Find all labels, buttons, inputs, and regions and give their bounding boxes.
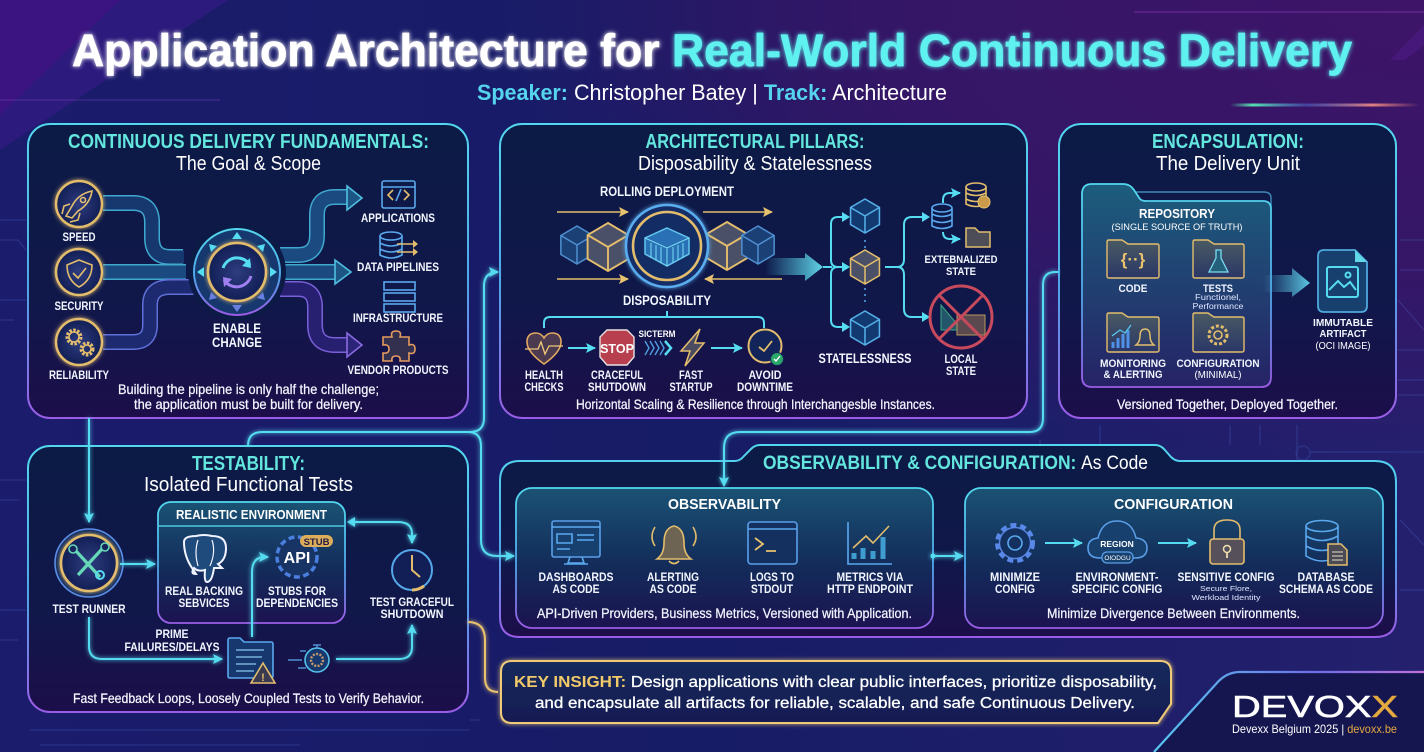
right labels: INFRASTRUCTURE	[353, 311, 443, 325]
icon: alerting bell	[652, 526, 696, 564]
configuration heading: CONFIGURATION	[1114, 496, 1233, 513]
left labels: RELIABILITY	[49, 368, 109, 382]
arrow	[568, 347, 595, 349]
observability labels: LOGS TO	[750, 570, 794, 584]
panel: architectural pillars	[500, 124, 1027, 418]
artifact label	[1313, 317, 1373, 352]
icon: stop sign	[600, 330, 634, 365]
icon: region cloud	[1088, 521, 1147, 563]
panel: continuous delivery fundamentals	[28, 124, 468, 418]
configuration labels: DATABASE	[1298, 570, 1354, 584]
environment heading: REALISTIC ENVIRONMENT	[176, 508, 327, 522]
panel heading: Isolated Functional Tests	[144, 474, 353, 496]
test shutdown label: TEST GRACEFUL	[370, 595, 454, 609]
configuration labels: Secure Flore,	[1200, 584, 1252, 593]
enable change hub	[188, 223, 286, 321]
arrow	[711, 347, 742, 349]
icon: dashboards monitor	[552, 521, 600, 564]
icon: region cloud: OIODGU	[1104, 555, 1131, 562]
step labels: SHUTDOWN	[588, 380, 646, 394]
rolling deployment label: ROLLING DEPLOYMENT	[600, 184, 735, 199]
left labels: SPEED	[62, 230, 96, 244]
configuration note: Minimize Divergence Between Environments.	[1047, 605, 1300, 621]
icon: stop sign: STOP	[600, 342, 634, 356]
local state prohibited icon	[930, 286, 992, 348]
folder: monitoring	[1107, 313, 1159, 352]
configuration labels: SCHEMA AS CODE	[1279, 582, 1373, 596]
folder labels: (MINIMAL)	[1194, 369, 1242, 381]
step labels	[524, 368, 793, 394]
folder labels: MONITORING	[1100, 358, 1166, 370]
icon: failure script with warning	[228, 638, 275, 684]
icon: stubbed api gear: API	[284, 550, 310, 567]
configuration labels: SENSITIVE CONFIG	[1178, 570, 1274, 584]
icon: data pipelines	[380, 232, 418, 258]
subtitle: Speaker: Christopher Batey | Track: Architecture	[477, 80, 947, 105]
icon: sensitive config lock	[1210, 520, 1244, 564]
icon: postgres elephant	[184, 535, 226, 582]
environment labels	[165, 584, 338, 610]
folder labels: TESTS	[1203, 283, 1233, 295]
panel heading	[144, 453, 353, 496]
panel note: Versioned Together, Deployed Together.	[1117, 396, 1338, 412]
panel: observability and configuration	[500, 445, 1396, 637]
icon: speed rocket	[56, 181, 102, 227]
panel note: Building the pipeline is only half the challenge;	[118, 381, 379, 397]
icon: infrastructure	[384, 282, 415, 312]
sigterm signal	[638, 329, 676, 355]
right labels: VENDOR PRODUCTS	[348, 363, 448, 377]
configuration labels: SPECIFIC CONFIG	[1072, 582, 1162, 596]
repository heading: REPOSITORY	[1139, 207, 1216, 221]
icon: fast startup bolt	[681, 329, 704, 366]
arrow to artifact	[1263, 268, 1310, 297]
icon: database schema	[1306, 520, 1347, 565]
folder labels: & ALERTING	[1104, 369, 1162, 381]
right labels: APPLICATIONS	[361, 211, 435, 225]
big arrow to statelessness	[765, 253, 823, 281]
connector lines between panels	[89, 272, 1058, 692]
panel heading: OBSERVABILITY & CONFIGURATION: As Code	[763, 453, 1148, 474]
observability labels: METRICS VIA	[836, 570, 904, 584]
devoxx tagline: Devexx Belgium 2025 | devoxx.be	[1232, 722, 1397, 736]
arrow	[1158, 542, 1196, 544]
icon: stopwatch	[288, 645, 329, 672]
icon: immutable artifact	[1318, 250, 1367, 312]
local state label	[944, 352, 978, 378]
panel heading: ARCHITECTURAL PILLARS:	[646, 131, 864, 153]
panel heading: The Delivery Unit	[1156, 153, 1300, 175]
icon: applications window	[382, 181, 415, 208]
panel heading: ENCAPSULATION:	[1152, 131, 1304, 153]
stateless cubes	[851, 199, 879, 345]
bracket	[544, 311, 764, 328]
test runner label: TEST RUNNER	[52, 602, 126, 616]
step labels: HEALTH	[525, 368, 563, 382]
externalized state label	[924, 254, 998, 278]
environment labels: SEBVICES	[178, 596, 230, 610]
icon: avoid downtime clock	[748, 330, 784, 366]
panel: encapsulation	[1059, 124, 1396, 418]
local state label: LOCAL	[944, 352, 978, 366]
realistic environment box	[158, 502, 345, 623]
panel note: the application must be built for delivery.	[134, 396, 363, 412]
icon: test runner	[55, 529, 123, 597]
panel note	[118, 381, 379, 412]
icon: security shield	[56, 249, 102, 295]
environment labels: REAL BACKING	[165, 584, 243, 598]
icon: stubbed api gear: STUB	[304, 537, 330, 548]
test shutdown label: SHUTDOWN	[380, 607, 444, 621]
panel note: Fast Feedback Loops, Loosely Coupled Tests to Verify Behavior.	[73, 690, 424, 706]
configuration labels: Werkload Identity	[1192, 593, 1261, 602]
externalized state icons	[932, 183, 990, 247]
panel heading: CONTINUOUS DELIVERY FUNDAMENTALS:	[68, 131, 429, 153]
configuration labels	[990, 570, 1373, 602]
observability heading: OBSERVABILITY	[668, 496, 781, 513]
icon: vendor products puzzle	[383, 331, 415, 361]
externalized state label: STATE	[946, 266, 976, 278]
key insight text: and encapsulate all artifacts for reliable, scalable, and safe Continuous Delivery.	[535, 695, 1135, 712]
configuration labels: MINIMIZE	[990, 570, 1040, 584]
panel note: Horizontal Scaling & Resilience through Interchangesble Instances.	[576, 396, 935, 412]
right labels	[348, 211, 448, 377]
folder: tests	[1193, 240, 1244, 278]
panel: testability	[28, 446, 468, 712]
sub-panel: observability	[516, 488, 933, 628]
step labels: STARTUP	[670, 380, 712, 394]
prime failures label: PRIME	[156, 627, 188, 641]
folder labels: CODE	[1118, 283, 1148, 295]
folder: code: {··}	[1121, 250, 1146, 269]
disposability hub	[626, 205, 708, 287]
step labels: CHECKS	[524, 380, 564, 394]
step labels: DOWNTIME	[737, 380, 793, 394]
environment labels: DEPENDENCIES	[256, 596, 338, 610]
left labels	[49, 230, 109, 382]
artifact label: (OCI IMAGE)	[1316, 340, 1370, 352]
flow bands	[103, 197, 348, 345]
artifact label: ARTIFACT	[1320, 328, 1367, 340]
observability labels: AS CODE	[650, 582, 696, 596]
enable change label: ENABLE	[213, 320, 261, 336]
enable change label: CHANGE	[212, 334, 262, 350]
test shutdown label	[370, 595, 454, 621]
key insight text: KEY INSIGHT: Design applications with clear public interfaces, prioritize disposability,	[514, 674, 1157, 691]
arrow	[1045, 542, 1082, 544]
sigterm signal: SICTERM	[638, 329, 676, 339]
panel heading	[68, 131, 429, 175]
key insight text	[514, 674, 1157, 712]
externalized state label: EXTEBNALIZED	[924, 254, 998, 266]
local state label: STATE	[946, 364, 976, 378]
icon: stubbed api gear	[277, 535, 333, 577]
repository folder	[1082, 184, 1271, 387]
prime failures label: FAILURES/DELAYS	[124, 640, 220, 654]
panel heading: The Goal & Scope	[176, 153, 321, 175]
enable change label	[212, 320, 262, 350]
step labels: CRACEFUL	[591, 368, 643, 382]
icon: logs terminal	[748, 522, 797, 564]
folder labels: Functionel,	[1195, 292, 1241, 302]
panel heading	[638, 131, 872, 175]
stateless branches	[823, 212, 930, 332]
step labels: AVOID	[748, 368, 782, 382]
folder: code	[1107, 240, 1159, 278]
right labels: DATA PIPELINES	[357, 260, 439, 274]
environment labels: STUBS FOR	[268, 584, 326, 598]
observability labels: HTTP ENDPOINT	[827, 582, 914, 596]
sub-panel: configuration	[965, 488, 1383, 628]
prime failures label	[124, 627, 220, 654]
artifact label: IMMUTABLE	[1313, 317, 1373, 329]
observability labels: DASHBOARDS	[538, 570, 614, 584]
icon: test shutdown clock	[392, 550, 432, 590]
deployment cubes	[561, 222, 774, 271]
devoxx corner	[1154, 672, 1424, 752]
observability labels: STDOUT	[751, 582, 794, 596]
statelessness label: STATELESSNESS	[818, 351, 912, 366]
configuration labels: ENVIRONMENT-	[1076, 570, 1158, 584]
step labels: FAST	[679, 368, 704, 382]
flow arrows	[89, 517, 412, 659]
repository heading	[1112, 207, 1242, 233]
folder labels	[1100, 283, 1260, 381]
icon: health checks heart	[525, 333, 563, 364]
repository heading: (SINGLE SOURCE OF TRUTH)	[1112, 222, 1242, 233]
panel heading: Disposability & Statelessness	[638, 153, 872, 175]
icon: metrics chart	[848, 522, 892, 564]
panel heading	[1152, 131, 1304, 175]
observability labels	[538, 570, 914, 596]
icon: minimize config gear	[997, 525, 1033, 561]
left labels: SECURITY	[54, 299, 104, 313]
icon: reliability gears	[56, 319, 102, 365]
icon: failure script with warning: !	[261, 672, 265, 684]
configuration labels: CONFIG	[995, 582, 1035, 596]
folder: configuration	[1193, 313, 1244, 352]
icon: region cloud: REGION	[1100, 539, 1134, 549]
title: Application Architecture for Real-World Continuous Delivery	[72, 25, 1352, 76]
disposability label: DISPOSABILITY	[623, 293, 711, 308]
panel heading: TESTABILITY:	[192, 453, 305, 475]
rolling arrows	[557, 212, 782, 279]
observability labels: AS CODE	[552, 582, 600, 596]
folder labels: Performance	[1192, 301, 1244, 311]
observability labels: ALERTING	[647, 570, 699, 584]
devoxx logo: DEVOX X	[1232, 689, 1398, 724]
observability note: API-Driven Providers, Business Metrics, Versioned with Application.	[537, 605, 912, 621]
folder labels: CONFIGURATION	[1176, 358, 1260, 370]
key insight callout	[501, 661, 1171, 723]
arrow heads	[335, 186, 362, 357]
